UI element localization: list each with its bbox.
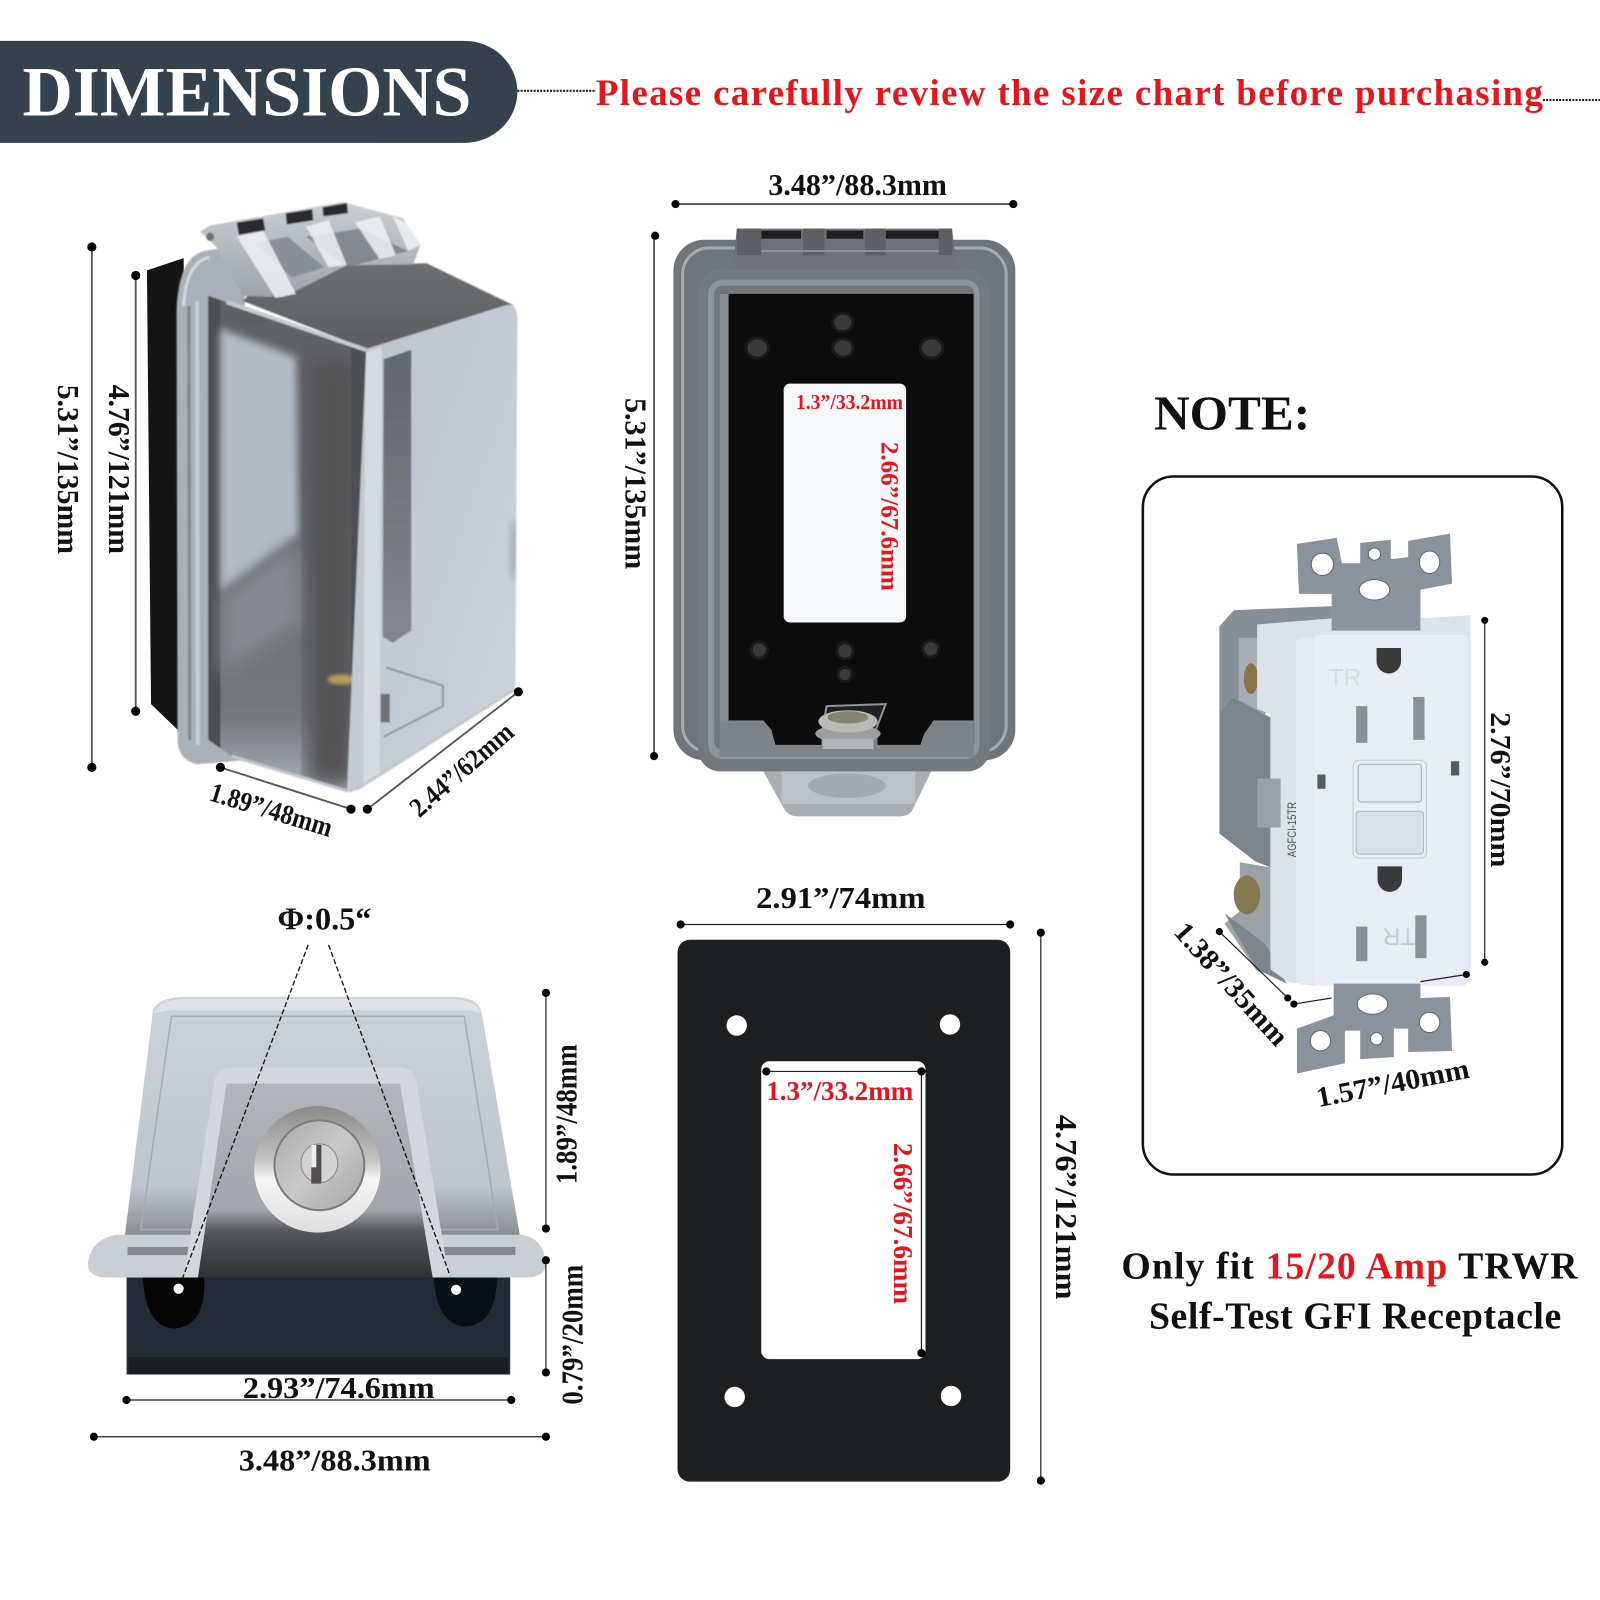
faint TR marks: TR [1329, 665, 1361, 692]
label: window width: 1.3”/33.2mm [796, 390, 903, 414]
hinge [733, 229, 957, 273]
metal bracket bottom [1297, 984, 1452, 1073]
label: diameter: Φ:0.5“ [278, 902, 371, 937]
test and reset buttons [1353, 760, 1427, 858]
label: gasket width: 2.91”/74mm [756, 881, 926, 915]
note text: fit restriction: Self-Test GFI Receptacle [1149, 1296, 1561, 1338]
dimension lines [654, 204, 1013, 756]
panel: foam gasket [677, 881, 1083, 1485]
label: opening width: 1.3”/33.2mm [766, 1075, 913, 1106]
label: total width: 3.48”/88.3mm [239, 1443, 431, 1477]
clear cover [124, 997, 520, 1239]
dimension lines [1219, 620, 1485, 1004]
gray side body [1219, 606, 1332, 714]
black interior [719, 294, 973, 738]
dimension lines [92, 247, 518, 809]
dimension lines [681, 924, 1041, 1481]
dashed pointers [182, 945, 450, 1281]
label: opening height: 2.66”/67.6mm [888, 1143, 919, 1304]
label: window height: 2.66”/67.6mm [876, 442, 905, 591]
bottom ledge [719, 720, 973, 757]
cover left face [208, 296, 366, 792]
label: height 5.31: 5.31”/135mm [51, 385, 85, 554]
bottom lock tab [757, 760, 937, 816]
screw holes [173, 1284, 184, 1294]
inner lock housing [184, 1067, 449, 1278]
label: depth 1.89: 1.89”/48mm [206, 776, 337, 843]
label: gasket height: 4.76”/121mm [1049, 1115, 1083, 1299]
panel: GFI receptacle [1143, 477, 1562, 1174]
screw latch [815, 704, 886, 749]
header banner: DIMENSIONS: DIMENSIONS [22, 52, 471, 131]
header banner: DIMENSIONS [0, 41, 517, 143]
hinge [200, 202, 420, 297]
metal bracket top [1297, 534, 1452, 618]
ground holes [1377, 648, 1401, 673]
dimension lines [94, 993, 546, 1437]
white side [1257, 615, 1470, 986]
label: receptacle width: 1.57”/40mm [1314, 1054, 1472, 1114]
flange [88, 1235, 546, 1278]
heading: NOTE: NOTE: [1154, 386, 1310, 441]
panel: GFI receptacle: TR [1383, 923, 1415, 950]
panel: bottom view with key lock [88, 902, 590, 1477]
oval knockouts [143, 1276, 204, 1329]
label: receptacle height: 2.76”/70mm [1484, 712, 1515, 868]
label: base width: 2.93”/74.6mm [243, 1371, 435, 1405]
clear cover flange [177, 245, 245, 764]
label: height 5.31: 5.31”/135mm [619, 398, 653, 569]
brass screws [1244, 663, 1258, 694]
white window [784, 384, 906, 622]
notice: review size chart: Please carefully review the size chart before purchasing [596, 72, 1543, 113]
front face [1313, 635, 1468, 986]
outer frame [673, 240, 1015, 760]
cover top face [243, 263, 513, 349]
key lock [254, 1106, 381, 1233]
panel: perspective view of clear cover [51, 202, 523, 843]
model text: AGFCI-15TR [1285, 802, 1299, 857]
label: base depth: 0.79”/20mm [556, 1265, 590, 1405]
note text: fit restriction: Only fit 15/20 Amp TRWR [1121, 1246, 1578, 1288]
note text: fit restriction [1121, 1246, 1578, 1338]
label: cover depth: 1.89”/48mm [550, 1044, 584, 1184]
slots [1356, 697, 1427, 961]
cover right face [347, 305, 517, 791]
label: depth 2.44: 2.44”/62mm [403, 716, 520, 823]
panel: front view, open base [619, 168, 1017, 816]
label: width 3.48: 3.48”/88.3mm [768, 168, 947, 202]
inner rim [698, 269, 990, 771]
black base box [127, 1270, 510, 1374]
mounting holes [746, 313, 943, 682]
label: receptacle depth: 1.38”/35mm [1167, 917, 1294, 1053]
black back box [147, 258, 186, 731]
label: height 4.76: 4.76”/121mm [102, 385, 136, 554]
